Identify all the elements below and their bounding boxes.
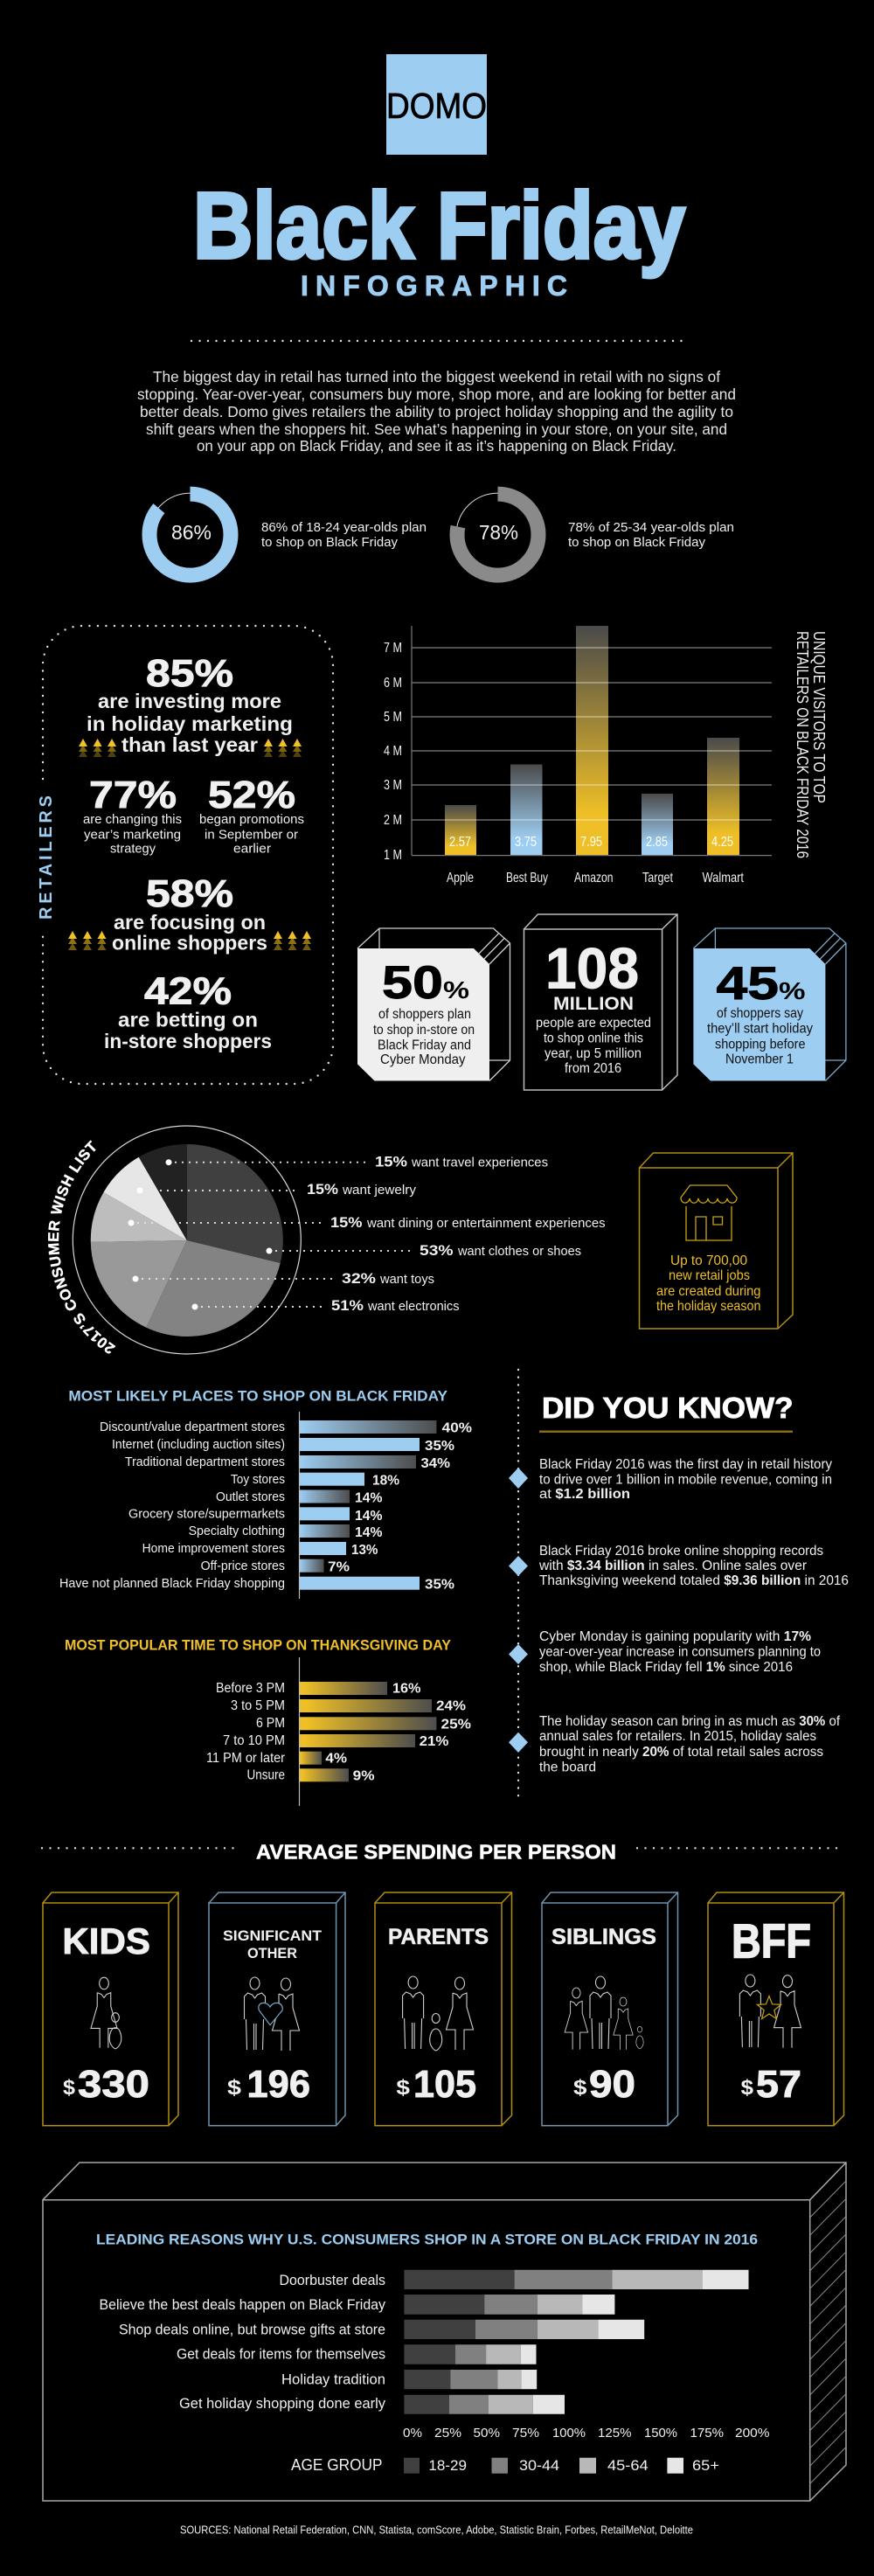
bars xyxy=(300,1420,436,1590)
card: siblings xyxy=(542,1892,678,2126)
fact 3 xyxy=(539,1629,821,1675)
box: 50% of shoppers: % xyxy=(443,976,469,1003)
heading: DID YOU KNOW? xyxy=(542,1392,794,1424)
box: 45% of shoppers: % xyxy=(779,977,806,1004)
box: 50% of shoppers: Cyber Monday xyxy=(380,1052,466,1067)
row labels: Discount/value department stores xyxy=(100,1420,285,1434)
stat: 42%: are betting on xyxy=(118,1009,258,1031)
box: 45% of shoppers: shopping before xyxy=(715,1037,806,1052)
stat: 52%: earlier xyxy=(233,841,271,857)
fact 4: brought in nearly 20% of total retail sales across xyxy=(539,1745,823,1760)
icon: arrows left xyxy=(79,739,116,757)
stat: 52%: 52% xyxy=(208,774,295,816)
values: 24% xyxy=(436,1699,466,1713)
row labels xyxy=(206,1681,285,1783)
stat: 85%: than last year xyxy=(121,733,258,756)
legend xyxy=(291,2456,719,2474)
axis labels: 75% xyxy=(512,2426,539,2441)
icon: store xyxy=(681,1185,737,1240)
ring xyxy=(73,1126,301,1354)
curved title: 2017’S CONSUMER WISH LIST xyxy=(48,1140,115,1353)
card: parents: 105 xyxy=(413,2063,476,2106)
stat: 77%: are changing this xyxy=(83,812,182,827)
stat: 52%: began promotions xyxy=(199,812,304,827)
chart: most likely places to shop xyxy=(59,1387,472,1599)
fact 1: Black Friday 2016 was the first day in retail history xyxy=(539,1457,832,1472)
fact 2 xyxy=(538,1544,849,1588)
values: 16% xyxy=(392,1682,421,1696)
icon: arrows left 2 xyxy=(68,931,107,950)
intro paragraph: shift gears when the shoppers hit. See what’s happening in your store, on your site, and xyxy=(146,420,727,438)
sources: SOURCES: National Retail Federation, CNN, Statista, comScore, Adobe, Statistic Brain, Forbes, RetailMeNot, Deloitte xyxy=(180,2524,693,2537)
box: retail jobs: Up to 700,00 xyxy=(670,1253,747,1268)
box: 45% of shoppers: of shoppers say xyxy=(717,1006,803,1021)
axis labels: 6 M xyxy=(384,676,402,691)
axis labels: 175% xyxy=(690,2426,724,2441)
heading: MOST POPULAR TIME TO SHOP ON THANKSGIVING DAY xyxy=(65,1637,452,1654)
stat: 52% xyxy=(199,774,304,857)
box: 45% of shoppers: 45 xyxy=(717,958,779,1010)
axis labels: 7 M xyxy=(384,641,402,656)
heading: LEADING REASONS WHY U.S. CONSUMERS SHOP IN A STORE ON BLACK FRIDAY IN 2016 xyxy=(96,2232,758,2247)
axis labels: 2 M xyxy=(384,813,402,828)
stat: 58%: 58% xyxy=(146,872,233,915)
categories: Apple xyxy=(447,871,474,885)
legend: 30-44 xyxy=(519,2457,559,2474)
fact 4: the board xyxy=(539,1760,596,1775)
stat: 77% xyxy=(83,774,182,857)
fact 2: Black Friday 2016 broke online shopping records xyxy=(539,1544,823,1559)
box: 108 million: to shop online this xyxy=(544,1031,643,1045)
fact 3: Cyber Monday is gaining popularity with 17% xyxy=(539,1629,811,1644)
axis labels: 100% xyxy=(552,2426,586,2441)
icon: friends with star xyxy=(739,1975,801,2048)
axis labels: 125% xyxy=(598,2426,631,2441)
chart title: unique visitors xyxy=(794,631,828,858)
heading: MOST LIKELY PLACES TO SHOP ON BLACK FRIDAY xyxy=(68,1387,448,1404)
card: kids: 330 xyxy=(78,2063,149,2106)
row labels xyxy=(100,2273,386,2412)
label: electronics: want electronics xyxy=(367,1299,460,1314)
label: jewelry: 15% xyxy=(307,1181,338,1198)
row labels: Specialty clothing xyxy=(189,1524,285,1538)
card: siblings: SIBLINGS xyxy=(551,1925,656,1949)
stat: 42%: 42% xyxy=(144,970,232,1012)
donut: 86% of 18-24 year-olds: 86% of 18-24 year-olds plan xyxy=(261,521,427,535)
row labels: Outlet stores xyxy=(216,1489,285,1504)
icon: arrows right 2 xyxy=(274,931,311,950)
card: kids xyxy=(43,1892,178,2126)
stat: 58% xyxy=(112,872,267,955)
donut: 78% of 25-34 year-olds xyxy=(456,493,734,576)
card: bff: 57 xyxy=(756,2063,801,2106)
box: 108 million: from 2016 xyxy=(565,1061,621,1076)
label: travel xyxy=(375,1153,548,1170)
box: 50% of shoppers: Black Friday and xyxy=(378,1038,471,1053)
row labels: Have not planned Black Friday shopping xyxy=(59,1576,285,1591)
stat: 85%: 85% xyxy=(146,652,233,695)
box: 45% of shoppers: they’ll start holiday xyxy=(707,1021,813,1037)
values: 18% xyxy=(372,1474,399,1488)
axis labels: 200% xyxy=(735,2426,769,2441)
row labels: Holiday tradition xyxy=(281,2372,385,2388)
legend: 45-64 xyxy=(607,2457,649,2474)
donut: 86% of 18-24 year-olds: to shop on Black Friday xyxy=(261,536,399,550)
categories: Best Buy xyxy=(506,871,548,885)
row labels: Internet (including auction sites) xyxy=(112,1437,285,1452)
donut: 78% of 25-34 year-olds: to shop on Black Friday xyxy=(568,536,706,550)
fact 1: at $1.2 billion xyxy=(539,1487,630,1502)
label: toys: 32% xyxy=(342,1270,376,1287)
values: 25% xyxy=(440,1717,471,1732)
axis labels: 0% xyxy=(403,2426,422,2441)
box: 108 million: people are expected xyxy=(536,1016,651,1031)
values: 13% xyxy=(351,1543,378,1558)
icon: parents with child xyxy=(403,1976,474,2051)
axis labels: 3 M xyxy=(384,778,402,793)
bars xyxy=(300,1682,436,1781)
card: kids: $ xyxy=(63,2076,76,2100)
fact 3: year-over-year increase in consumers planning to xyxy=(539,1645,821,1660)
card: siblings: $ xyxy=(573,2076,587,2100)
row labels: Off-price stores xyxy=(201,1559,285,1573)
icon: arrows right xyxy=(264,739,302,757)
card: significant other: OTHER xyxy=(247,1945,297,1962)
label: jewelry: want jewelry xyxy=(342,1183,417,1198)
bars xyxy=(445,626,739,856)
values: 14% xyxy=(355,1509,383,1524)
legend: 18-29 xyxy=(428,2457,467,2474)
row labels: Toy stores xyxy=(231,1472,285,1487)
row labels: Grocery store/supermarkets xyxy=(128,1507,285,1521)
axis labels xyxy=(384,641,402,863)
card: parents: PARENTS xyxy=(388,1925,489,1949)
card: parents: $ xyxy=(396,2076,411,2100)
icon: diamonds xyxy=(509,1468,528,1753)
title: INFOGRAPHIC xyxy=(301,270,567,302)
row labels: Get holiday shopping done early xyxy=(179,2396,386,2412)
row labels: 6 PM xyxy=(256,1716,285,1731)
stat: 77%: strategy xyxy=(110,841,156,857)
box: 108 million xyxy=(524,914,677,1090)
categories: Amazon xyxy=(574,871,614,885)
pie labels and leaders xyxy=(128,1153,606,1314)
categories: Target xyxy=(642,871,673,885)
label: toys xyxy=(342,1270,434,1287)
values: 40% xyxy=(442,1421,472,1436)
card: siblings: 90 xyxy=(589,2063,635,2106)
row labels: Traditional department stores xyxy=(125,1455,285,1469)
bar values: 3.75 xyxy=(515,835,537,850)
label: toys: want toys xyxy=(379,1272,434,1287)
row labels: Shop deals online, but browse gifts at store xyxy=(119,2323,385,2338)
intro paragraph xyxy=(137,368,736,455)
categories: Walmart xyxy=(703,871,744,885)
donut: 86% of 18-24 year-olds xyxy=(149,493,427,576)
box: 50% of shoppers: to shop in-store on xyxy=(373,1023,475,1038)
fact 1 xyxy=(539,1457,832,1502)
chart title: unique visitors: UNIQUE VISITORS TO TOP xyxy=(810,631,828,803)
panel: leading reasons xyxy=(43,2163,846,2501)
axis labels xyxy=(403,2426,769,2441)
donut: 78% of 25-34 year-olds: 78% xyxy=(479,521,518,544)
values: 9% xyxy=(353,1769,375,1783)
logo: DOMO xyxy=(386,54,487,155)
row labels: 3 to 5 PM xyxy=(231,1698,285,1713)
row labels: Home improvement stores xyxy=(142,1541,285,1556)
axis labels: 150% xyxy=(644,2426,677,2441)
row labels: Before 3 PM xyxy=(216,1681,285,1696)
heading: average spending per person: AVERAGE SPENDING PER PERSON xyxy=(256,1841,616,1864)
stacked bars xyxy=(404,2270,748,2414)
bar chart: unique visitors xyxy=(384,626,772,885)
box: 45% of shoppers xyxy=(693,928,846,1080)
card: parents xyxy=(375,1892,512,2126)
values: 7% xyxy=(328,1559,350,1575)
box: 45% of shoppers: November 1 xyxy=(725,1052,794,1067)
label: jewelry xyxy=(307,1181,417,1198)
label: clothes: 53% xyxy=(420,1242,453,1259)
bar values: 4.25 xyxy=(711,835,733,850)
row labels: Believe the best deals happen on Black Friday xyxy=(100,2297,386,2313)
icon: parent with child xyxy=(91,1977,121,2049)
box: 108 million: year, up 5 million xyxy=(545,1046,642,1061)
fact 4: annual sales for retailers. In 2015, holiday sales xyxy=(539,1729,816,1744)
legend: AGE GROUP xyxy=(291,2456,383,2474)
card: significant other: $ xyxy=(227,2076,242,2100)
stat: 58%: are focusing on xyxy=(114,911,266,934)
values xyxy=(325,1682,471,1783)
fact 4 xyxy=(539,1714,841,1775)
intro paragraph: The biggest day in retail has turned into the biggest weekend in retail with no signs of xyxy=(153,368,720,385)
row labels: 7 to 10 PM xyxy=(223,1733,285,1748)
box: retail jobs: new retail jobs xyxy=(669,1268,750,1283)
label: clothes xyxy=(420,1242,581,1259)
stat: 85%: in holiday marketing xyxy=(87,712,293,735)
card: kids: KIDS xyxy=(62,1920,150,1962)
box: 108 million: 108 xyxy=(545,935,639,1000)
card: bff: $ xyxy=(741,2076,754,2100)
row labels xyxy=(59,1420,285,1591)
donut: 78% of 25-34 year-olds: 78% of 25-34 year-olds plan xyxy=(568,521,734,535)
values: 35% xyxy=(425,1439,454,1454)
logo: DOMO: DOMO xyxy=(386,86,487,126)
label: electronics: 51% xyxy=(331,1297,364,1314)
icon: couple with heart xyxy=(245,1977,299,2051)
stat: 85%: are investing more xyxy=(98,690,281,712)
card: significant other: SIGNIFICANT xyxy=(223,1927,323,1944)
stat: 58%: online shoppers xyxy=(112,932,267,955)
stat: 52%: in September or xyxy=(205,827,298,843)
intro paragraph: stopping. Year-over-year, consumers buy more, shop more, and are looking for better and xyxy=(137,385,736,403)
fact 2: with $3.34 billion in sales. Online sales over xyxy=(538,1559,807,1573)
row labels: Unsure xyxy=(246,1767,285,1783)
donut: 86% of 18-24 year-olds: 86% xyxy=(171,521,212,544)
values: 34% xyxy=(421,1456,450,1471)
row labels: Get deals for items for themselves xyxy=(177,2347,385,2363)
axis labels: 25% xyxy=(434,2426,461,2441)
legend: 65+ xyxy=(692,2457,719,2474)
intro paragraph: better deals. Domo gives retailers the ability to project holiday shopping and the agility to xyxy=(140,403,733,420)
stat: 77%: 77% xyxy=(89,774,177,816)
card: significant other: 196 xyxy=(246,2063,310,2106)
card: significant other xyxy=(209,1892,345,2126)
values: 4% xyxy=(325,1752,347,1766)
intro paragraph: on your app on Black Friday, and see it as it’s happening on Black Friday. xyxy=(197,437,676,455)
fact 4: The holiday season can bring in as much as 30% of xyxy=(539,1714,841,1729)
label: dining: want dining or entertainment experiences xyxy=(366,1216,606,1231)
label: dining: 15% xyxy=(330,1214,362,1231)
box: retail jobs: are created during xyxy=(656,1284,760,1299)
pie chart: consumer wish list xyxy=(48,1125,302,1355)
title: Black Friday xyxy=(193,172,685,278)
icon: siblings xyxy=(565,1976,643,2050)
label: travel: 15% xyxy=(375,1153,407,1170)
stat: 85% xyxy=(87,652,293,756)
categories xyxy=(447,871,744,885)
box: 50% of shoppers: 50 xyxy=(382,957,443,1009)
values xyxy=(328,1421,472,1593)
bar values xyxy=(449,835,733,850)
chart title: unique visitors: RETAILERS ON BLACK FRIDAY 2016 xyxy=(794,631,811,858)
row labels: Doorbuster deals xyxy=(280,2273,385,2288)
pie slices xyxy=(91,1144,283,1337)
panel: did you know xyxy=(509,1392,849,1775)
label: electronics xyxy=(331,1297,460,1314)
card: bff xyxy=(708,1892,844,2126)
bar values: 2.85 xyxy=(646,835,668,850)
axis labels: 5 M xyxy=(384,710,402,725)
row labels: 11 PM or later xyxy=(206,1751,285,1766)
bar values: 7.95 xyxy=(580,835,602,850)
stat: 77%: year’s marketing xyxy=(84,827,181,843)
axis labels: 50% xyxy=(474,2426,500,2441)
chart: most popular time to shop xyxy=(65,1637,471,1806)
box: retail jobs: the holiday season xyxy=(656,1299,760,1314)
card: bff: BFF xyxy=(732,1913,811,1968)
box: 50% of shoppers xyxy=(357,928,510,1080)
box: retail jobs xyxy=(640,1153,793,1329)
heading: retailers: RETAILERS xyxy=(37,795,56,920)
values: 14% xyxy=(355,1491,383,1505)
values: 35% xyxy=(425,1577,454,1593)
fact 3: shop, while Black Friday fell 1% since 2016 xyxy=(539,1660,793,1675)
bar values: 2.57 xyxy=(449,835,471,850)
axis labels: 1 M xyxy=(384,848,402,863)
fact 2: Thanksgiving weekend totaled $9.36 billion in 2016 xyxy=(539,1573,849,1588)
values: 21% xyxy=(420,1734,448,1749)
panel: retailers xyxy=(37,626,333,1084)
stat: 42%: in-store shoppers xyxy=(104,1030,272,1052)
values: 14% xyxy=(355,1525,383,1540)
box: 108 million: MILLION xyxy=(553,994,634,1014)
label: travel: want travel experiences xyxy=(411,1155,548,1170)
label: clothes: want clothes or shoes xyxy=(457,1244,581,1259)
fact 1: to drive over 1 billion in mobile revenue, coming in xyxy=(539,1473,832,1488)
axis labels: 4 M xyxy=(384,744,402,759)
box: 50% of shoppers: of shoppers plan xyxy=(378,1007,471,1022)
stat: 42% xyxy=(104,970,272,1052)
